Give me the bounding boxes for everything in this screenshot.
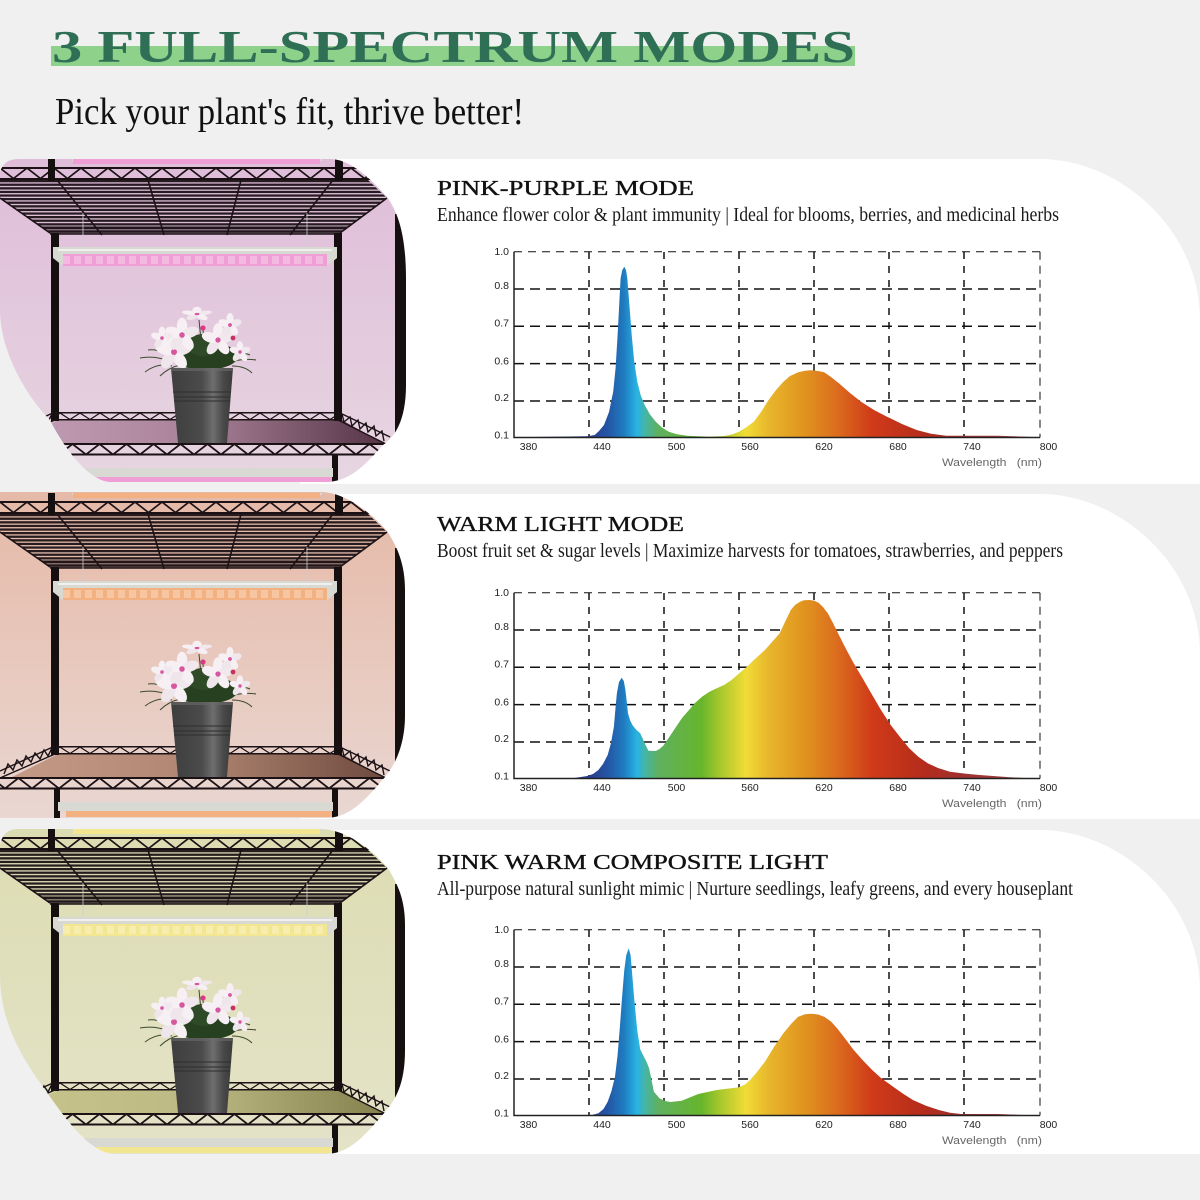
x axis labels: 560	[741, 782, 759, 794]
x axis labels	[520, 441, 1057, 453]
y axis labels: 1.0	[494, 924, 509, 936]
description: Enhance flower color & plant immunity | Ideal for blooms, berries, and medicinal herbs	[437, 204, 1059, 226]
photo: shelf under composite light	[0, 826, 410, 1156]
x axis labels: 740	[963, 782, 981, 794]
x axis labels: 620	[815, 1119, 833, 1131]
y axis labels: 0.1	[494, 1108, 509, 1120]
panel: pink warm composite light	[0, 826, 1200, 1156]
x axis labels: 740	[963, 1119, 981, 1131]
y axis labels: 1.0	[494, 587, 509, 599]
y axis labels: 0.7	[494, 996, 509, 1008]
panel: warm light mode	[0, 490, 1200, 820]
x axis labels	[520, 782, 1057, 794]
subtitle: Pick your plant's fit, thrive better!	[55, 91, 524, 133]
y axis labels: 0.8	[494, 621, 509, 633]
panel: pink-purple mode	[0, 159, 1200, 486]
axis title: Wavelength (nm)	[942, 798, 1042, 810]
y axis labels: 1.0	[494, 246, 509, 258]
x axis labels: 800	[1040, 782, 1057, 794]
y axis labels	[494, 587, 509, 782]
x axis labels: 500	[668, 441, 685, 453]
title: 3 FULL-SPECTRUM MODES	[52, 21, 855, 72]
y axis labels: 0.2	[494, 733, 509, 745]
y axis labels: 0.6	[494, 356, 509, 368]
x axis labels: 500	[668, 1119, 685, 1131]
y axis labels: 0.8	[494, 958, 509, 970]
x axis labels: 380	[520, 441, 537, 453]
x axis labels: 560	[741, 441, 759, 453]
y axis labels: 0.1	[494, 770, 509, 782]
x axis labels: 440	[593, 782, 611, 794]
x axis labels: 380	[520, 1119, 537, 1131]
spectrum chart	[494, 924, 1057, 1147]
description: All-purpose natural sunlight mimic | Nurture seedlings, leafy greens, and every houseplant	[437, 878, 1073, 900]
x axis labels: 560	[741, 1119, 759, 1131]
x axis labels: 440	[593, 1119, 611, 1131]
x axis labels: 620	[815, 782, 833, 794]
x axis labels: 680	[889, 441, 907, 453]
x axis labels: 380	[520, 782, 537, 794]
x axis labels: 740	[963, 441, 981, 453]
spectrum chart	[494, 246, 1057, 469]
axis title: Wavelength (nm)	[942, 1135, 1042, 1147]
x axis labels: 800	[1040, 441, 1057, 453]
x axis labels: 800	[1040, 1119, 1057, 1131]
y axis labels	[494, 924, 509, 1120]
photo: shelf under pink-purple light	[0, 159, 410, 486]
y axis labels	[494, 246, 509, 442]
axis title: Wavelength (nm)	[942, 457, 1042, 469]
y axis labels: 0.7	[494, 658, 509, 670]
x axis labels: 440	[593, 441, 611, 453]
x axis labels: 620	[815, 441, 833, 453]
y axis labels: 0.2	[494, 392, 509, 404]
y axis labels: 0.1	[494, 430, 509, 442]
y axis labels: 0.2	[494, 1070, 509, 1082]
photo: shelf under warm light	[0, 490, 410, 820]
y axis labels: 0.7	[494, 318, 509, 330]
heading: PINK-PURPLE MODE	[437, 176, 694, 200]
heading: WARM LIGHT MODE	[437, 512, 684, 536]
y axis labels: 0.8	[494, 280, 509, 292]
y axis labels: 0.6	[494, 696, 509, 708]
x axis labels: 680	[889, 1119, 907, 1131]
heading: PINK WARM COMPOSITE LIGHT	[437, 850, 828, 874]
x axis labels: 500	[668, 782, 685, 794]
x axis labels	[520, 1119, 1057, 1131]
description: Boost fruit set & sugar levels | Maximize harvests for tomatoes, strawberries, and peppers	[437, 540, 1063, 562]
spectrum chart	[494, 587, 1057, 810]
y axis labels: 0.6	[494, 1034, 509, 1046]
x axis labels: 680	[889, 782, 907, 794]
